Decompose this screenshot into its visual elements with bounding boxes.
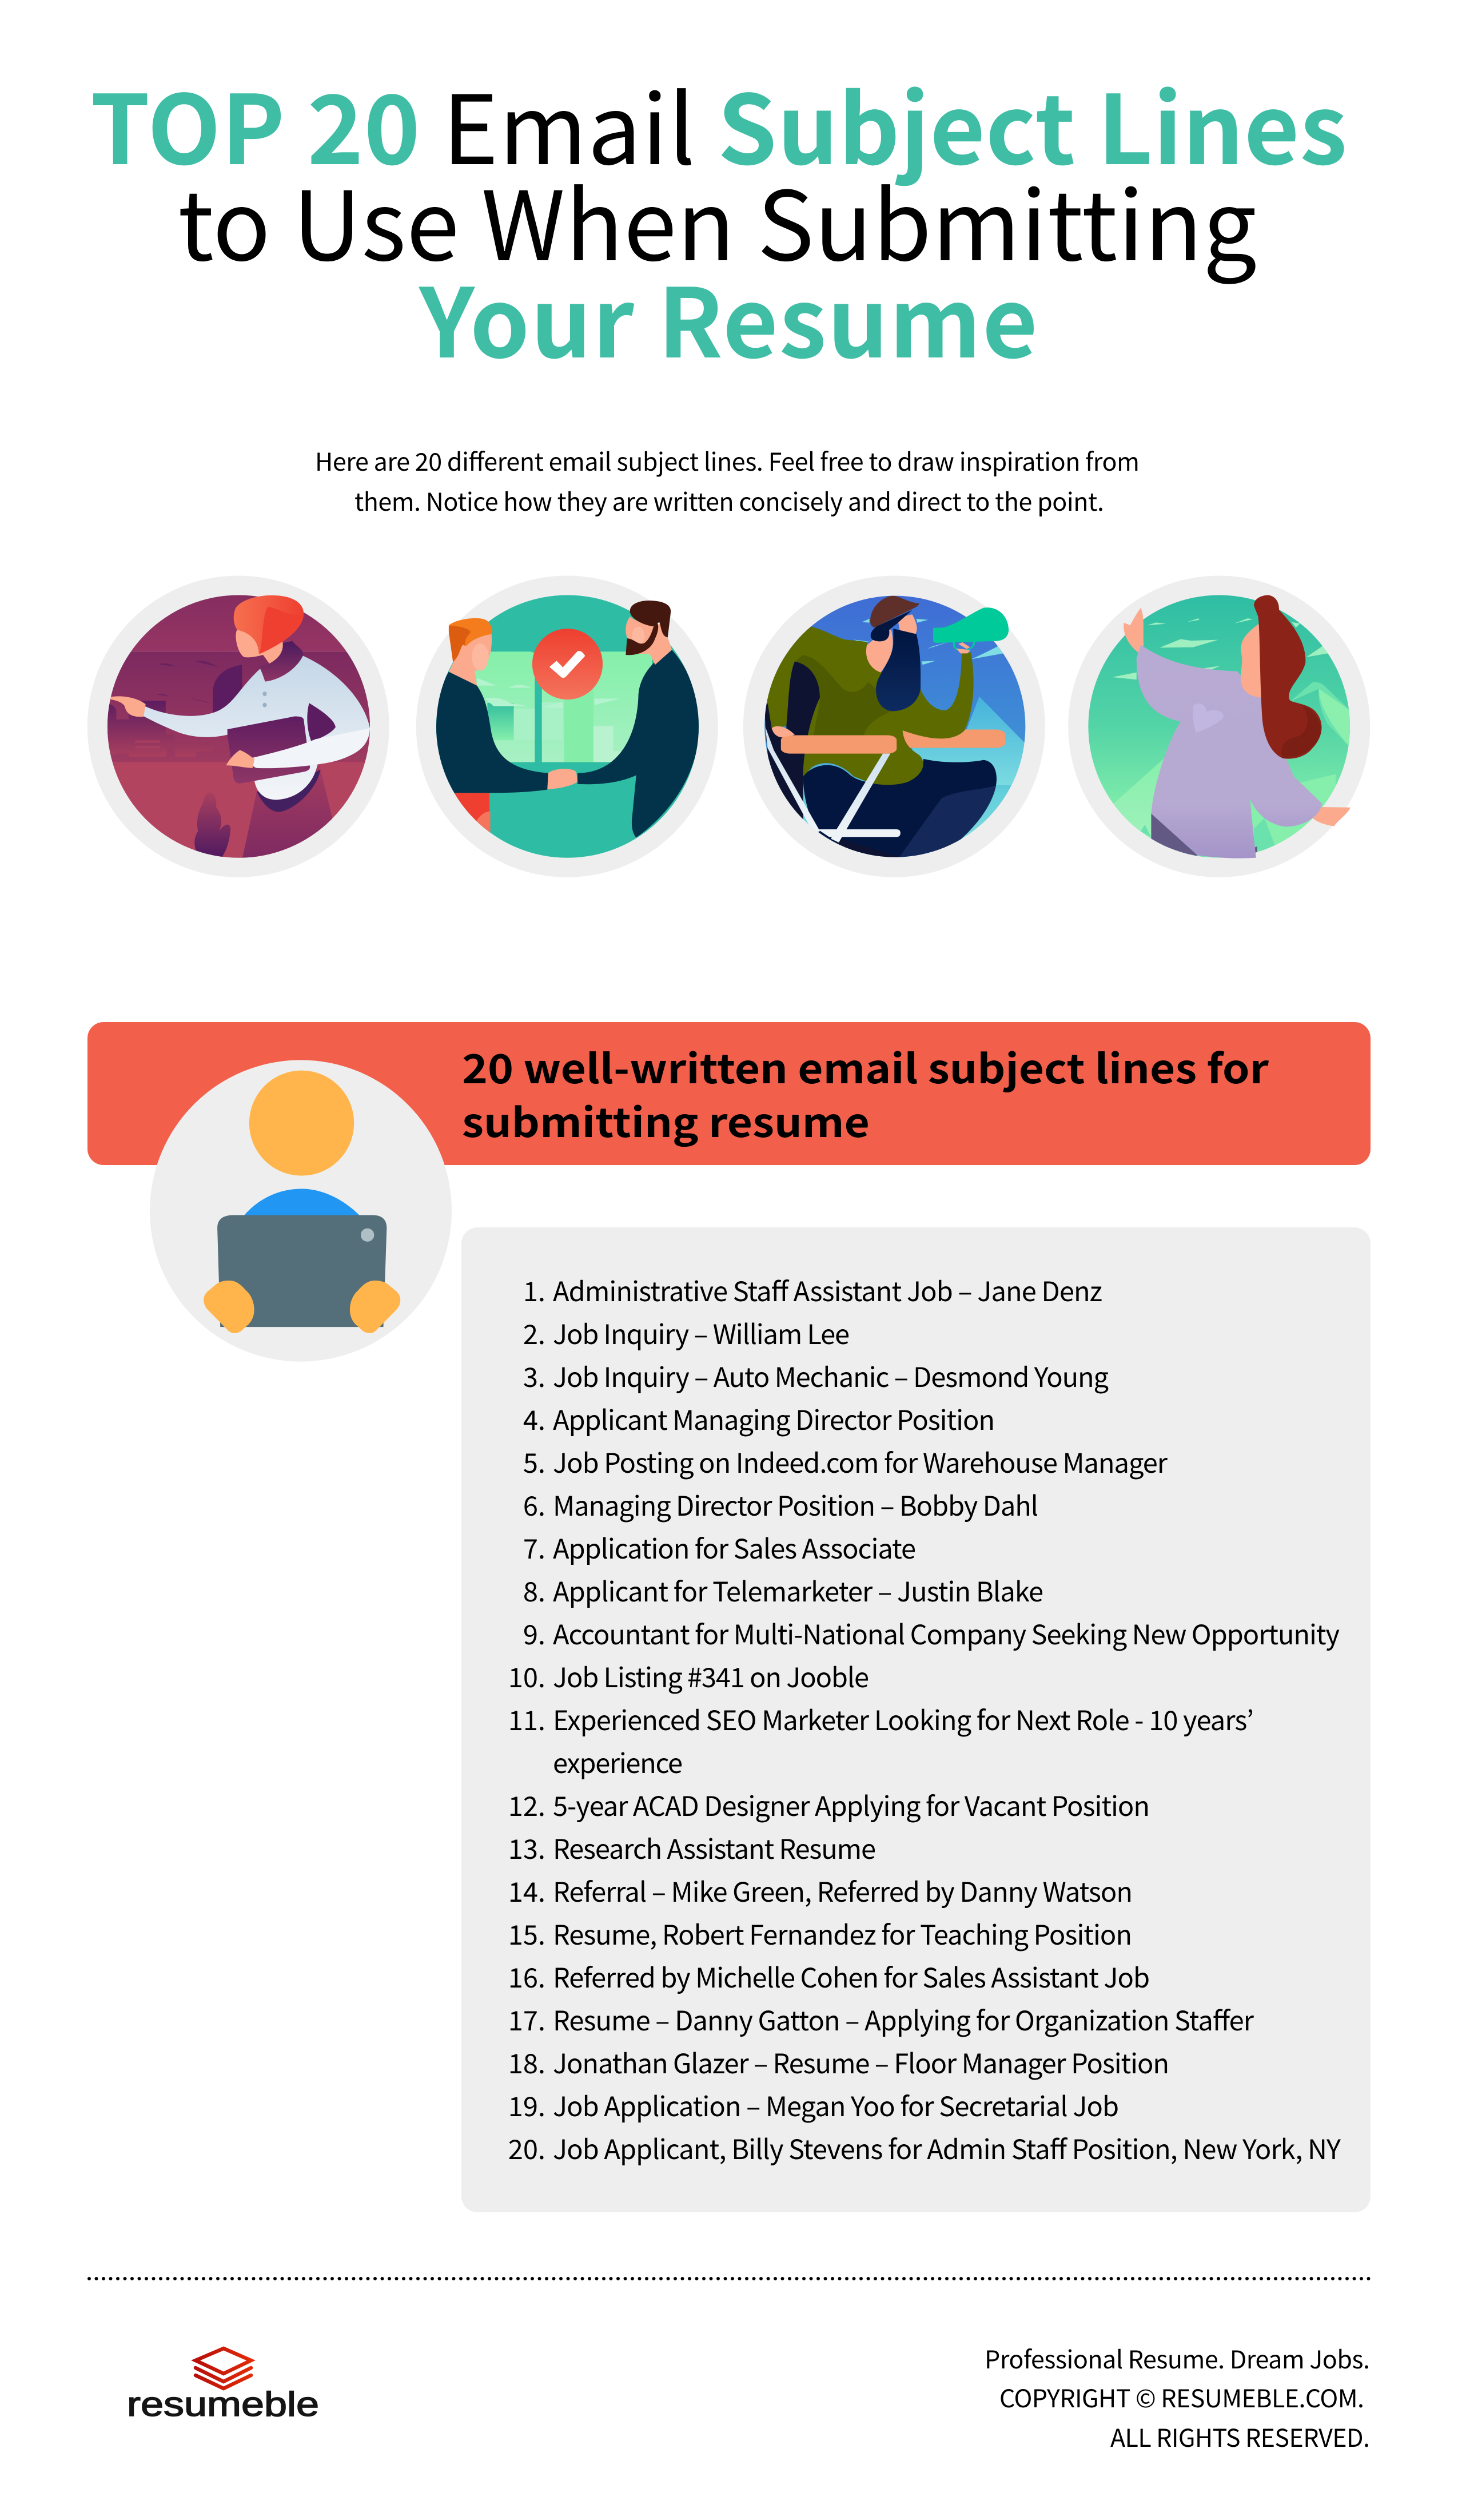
banner: section heading [87, 1022, 1371, 1165]
illustration: person pointing with folder [87, 575, 389, 877]
section heading: 20 well-written email subject lines for [462, 1038, 1269, 1095]
intro text: Here are 20 different email subject lines. Feel free to draw inspiration from [315, 443, 1140, 478]
list item 13: 13. [508, 1827, 545, 1867]
illustration: handshake with check badge [416, 575, 718, 877]
avatar: person with laptop [150, 1060, 452, 1362]
title line 2: to Use When Submitting [178, 150, 1257, 288]
icon: stacked layers [196, 2348, 251, 2388]
title line 1: TOP 20 Email Subject Lines [90, 54, 1347, 192]
list item 11: Experienced SEO Marketer Looking for Next Role - 10 years’ [553, 1699, 1254, 1738]
list item 11: experience [553, 1742, 683, 1781]
list item 7: Application for Sales Associate [553, 1527, 916, 1567]
footer text: ALL RIGHTS RESERVED. [1110, 2419, 1370, 2454]
intro text: them. Notice how they are written concisely and direct to the point. [354, 483, 1104, 518]
list item 3: 3. [523, 1356, 545, 1395]
list item 13: Research Assistant Resume [553, 1827, 876, 1867]
title line 3: Your Resume [418, 247, 1038, 385]
list item 8: Applicant for Telemarketer – Justin Blake [553, 1570, 1043, 1609]
list item 11: 11. [508, 1699, 545, 1738]
panel: subject lines list [461, 1227, 1371, 2212]
list item 15: 15. [508, 1913, 545, 1953]
title [90, 54, 1347, 385]
icon: megaphone [933, 607, 1009, 643]
list item 10: Job Listing #341 on Jooble [553, 1656, 869, 1695]
footer text [985, 2340, 1370, 2454]
list item 20: Job Applicant, Billy Stevens for Admin Staff Position, New York, NY [553, 2128, 1341, 2167]
intro text [315, 443, 1140, 518]
section heading [462, 1038, 1269, 1149]
icon: heart on robe [1193, 703, 1224, 733]
icon: check badge [532, 629, 603, 699]
footer text: Professional Resume. Dream Jobs. [985, 2340, 1370, 2376]
list item 15: Resume, Robert Fernandez for Teaching Position [553, 1913, 1132, 1953]
illustration: woman waving [1068, 575, 1370, 877]
list item 6: Managing Director Position – Bobby Dahl [553, 1484, 1038, 1524]
illustration: person with megaphone on chair [743, 575, 1045, 877]
list item 11 [508, 1699, 1254, 1781]
list item 3: Job Inquiry – Auto Mechanic – Desmond Young [553, 1356, 1109, 1395]
list item 16: Referred by Michelle Cohen for Sales Assistant Job [553, 1956, 1150, 1996]
list item 17: Resume – Danny Gatton – Applying for Organization Staffer [553, 1999, 1254, 2038]
list item 18: 18. [508, 2042, 545, 2081]
list item 12: 5-year ACAD Designer Applying for Vacant Position [553, 1784, 1150, 1824]
list item 14: 14. [508, 1870, 545, 1910]
list item 5: 5. [523, 1441, 545, 1481]
list item 19: Job Application – Megan Yoo for Secretarial Job [553, 2085, 1119, 2124]
list item 5: Job Posting on Indeed.com for Warehouse Manager [553, 1441, 1168, 1481]
list item 8: 8. [523, 1570, 545, 1609]
list item 9: 9. [523, 1613, 545, 1652]
list item 6: 6. [523, 1484, 545, 1524]
footer text: COPYRIGHT © RESUMEBLE.COM. [999, 2379, 1364, 2415]
list item 10: 10. [508, 1656, 545, 1695]
list item 4: Applicant Managing Director Position [553, 1398, 995, 1438]
list item 16: 16. [508, 1956, 545, 1996]
section heading: submitting resume [462, 1091, 870, 1149]
list item 1: Administrative Staff Assistant Job – Jane Denz [553, 1270, 1102, 1309]
list item 9: Accountant for Multi-National Company Seeking New Opportunity [553, 1613, 1340, 1652]
logo: resumeble [127, 2348, 319, 2423]
list item 4: 4. [523, 1398, 545, 1438]
list item 20: 20. [508, 2128, 545, 2167]
list item 1: 1. [523, 1270, 545, 1309]
list item 17: 17. [508, 1999, 545, 2038]
list item 2: Job Inquiry – William Lee [553, 1313, 850, 1352]
list item 2: 2. [523, 1313, 545, 1352]
list item 19: 19. [508, 2085, 545, 2124]
list item 14: Referral – Mike Green, Referred by Danny Watson [553, 1870, 1133, 1910]
list item 12: 12. [508, 1784, 545, 1824]
list item 18: Jonathan Glazer – Resume – Floor Manager Position [553, 2042, 1169, 2081]
list item 7: 7. [523, 1527, 545, 1567]
wordmark: resumeble [127, 2385, 319, 2423]
